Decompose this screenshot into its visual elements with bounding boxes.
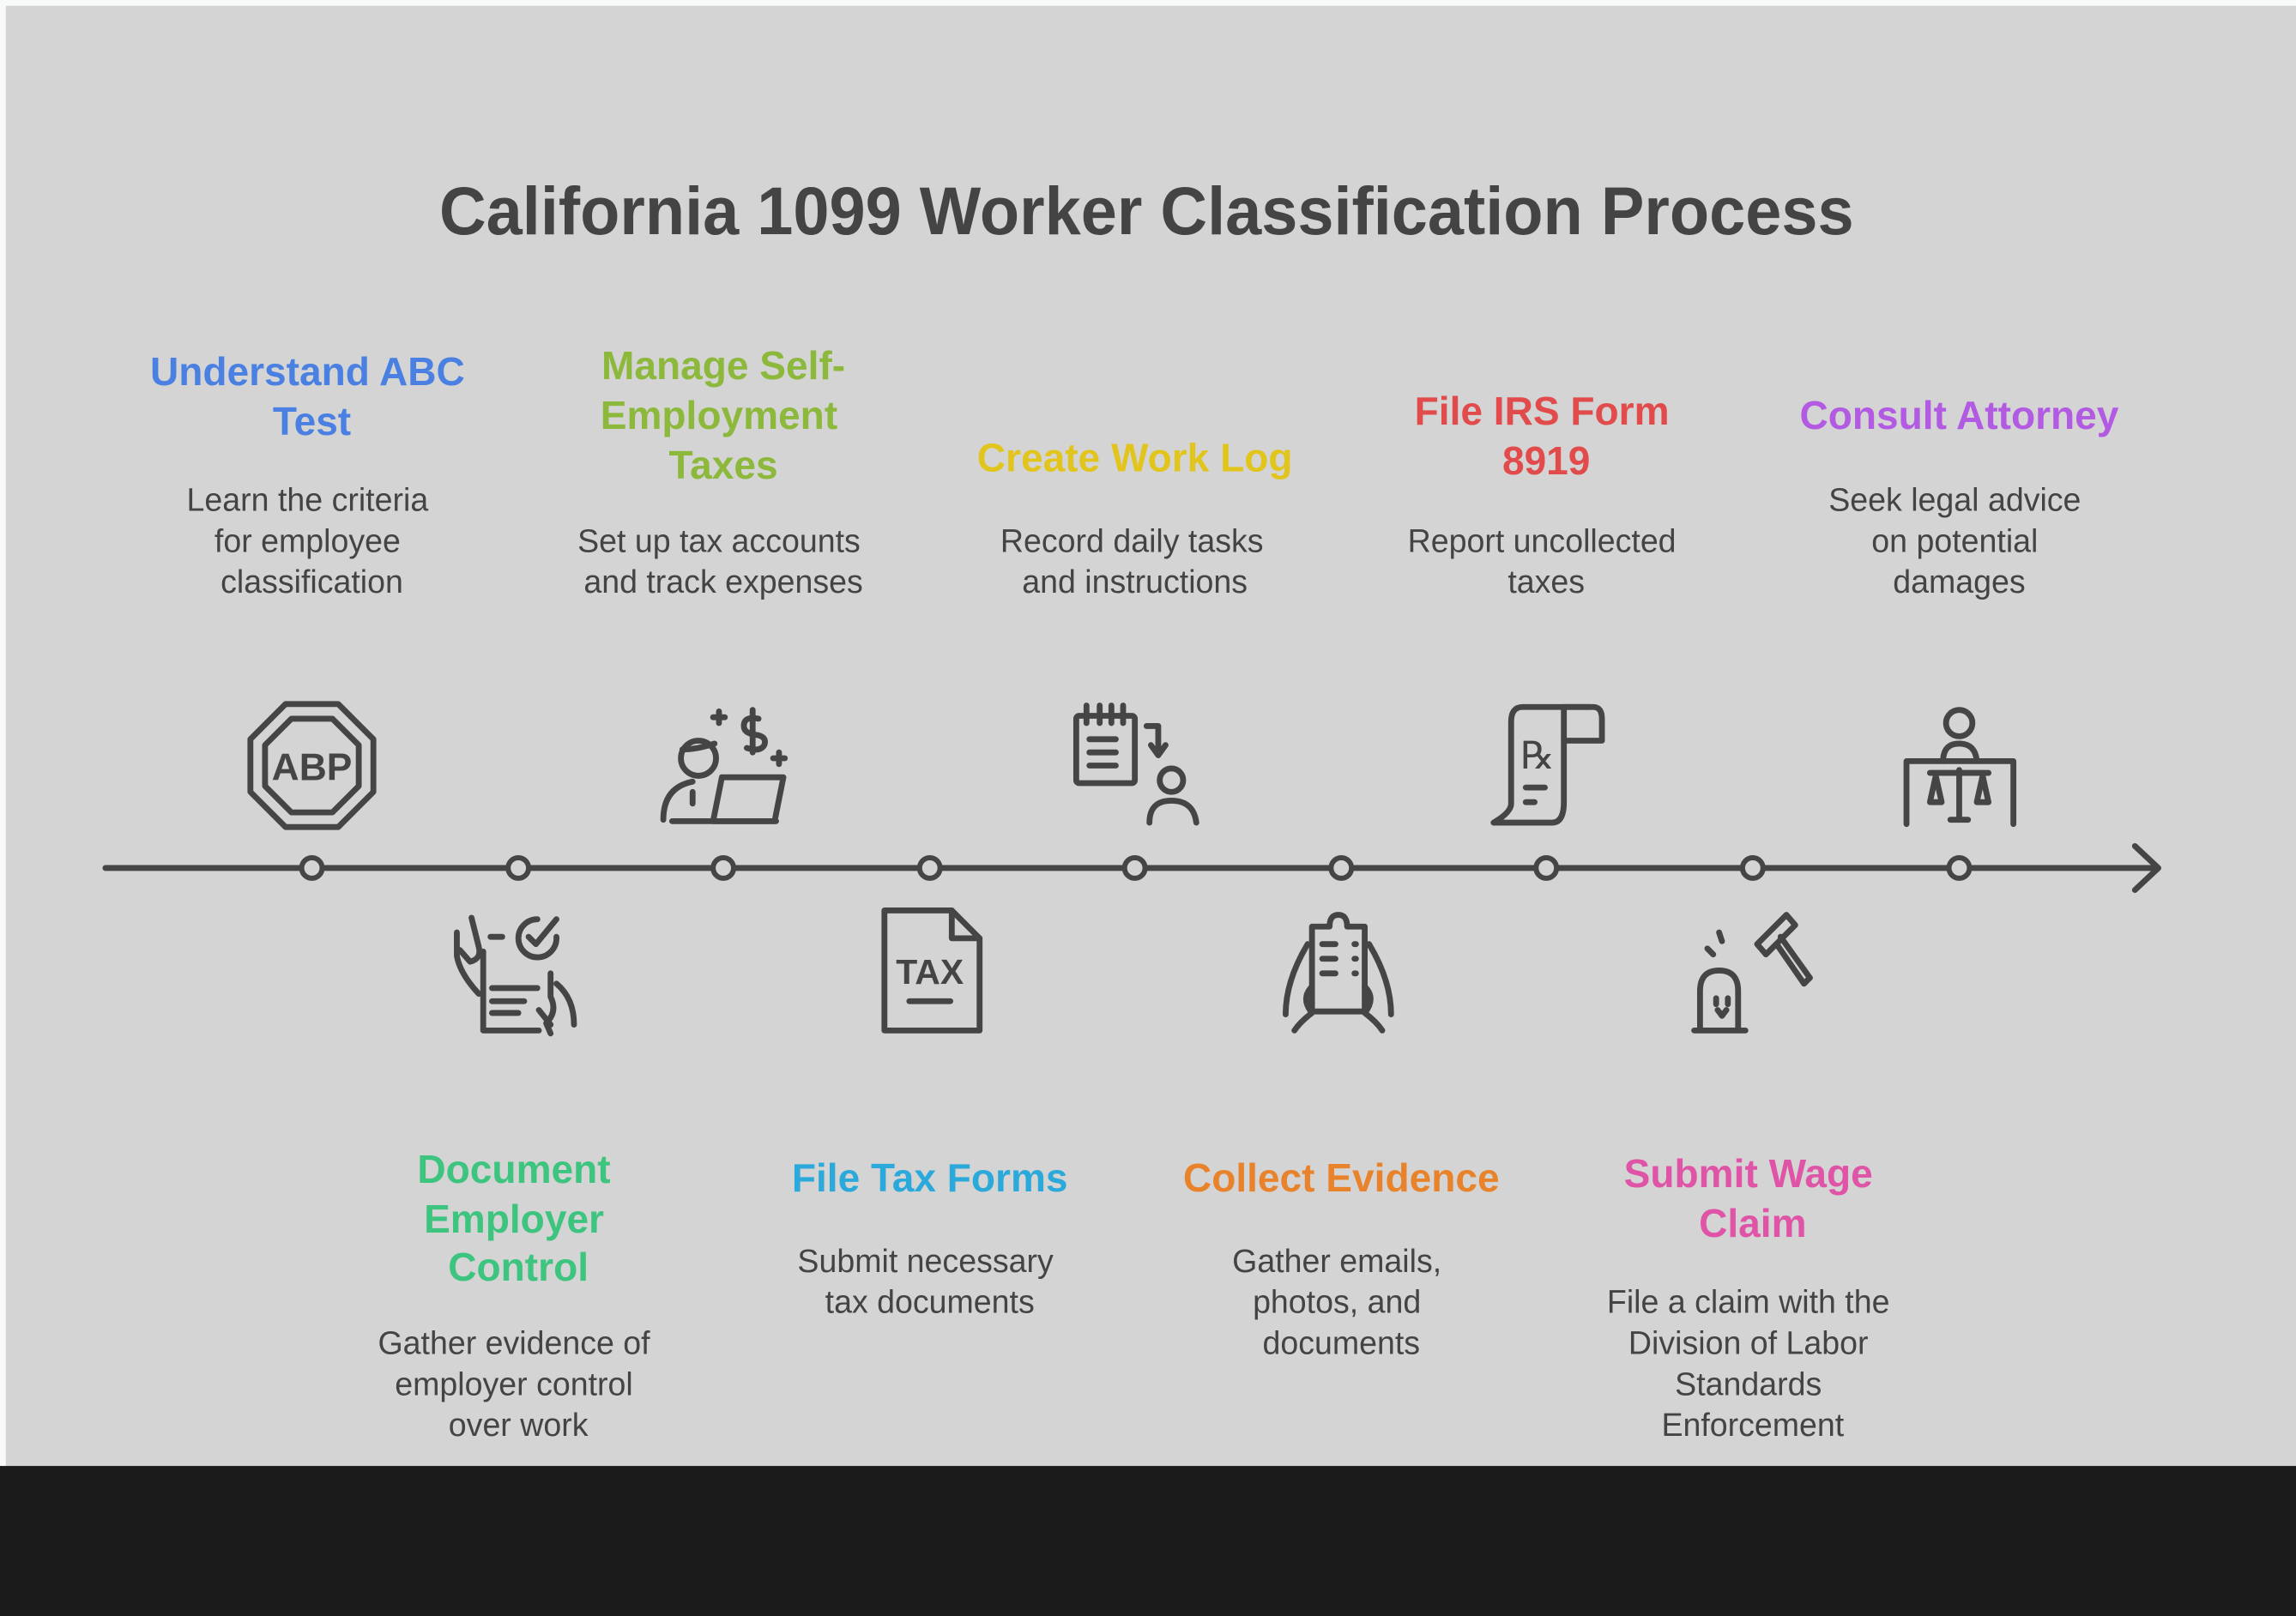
step: Submit Wage Claim: Claim — [1699, 1201, 1807, 1245]
icon: TAX document — [885, 910, 980, 1030]
step: Collect Evidence: Gather emails, — [1232, 1243, 1441, 1279]
step: Understand ABC Test: Understand ABC — [150, 349, 465, 394]
step: File Tax Forms: Submit necessary — [797, 1243, 1054, 1279]
step: Consult Attorney: Seek legal advice — [1828, 482, 2081, 518]
step: Document Employer Control: Control — [448, 1245, 589, 1289]
step: Submit Wage Claim: Standards — [1675, 1366, 1822, 1402]
icon: TAX document: TAX — [896, 952, 964, 992]
step: Manage Self-Employment Taxes: Taxes — [668, 443, 778, 487]
step: Document Employer Control: over work — [449, 1407, 589, 1443]
icon: form scroll — [1494, 707, 1602, 823]
step: Document Employer Control: Document — [417, 1147, 611, 1191]
step: Manage Self-Employment Taxes — [577, 343, 863, 600]
step: File Tax Forms: File Tax Forms — [792, 1155, 1068, 1200]
step: Submit Wage Claim: Submit Wage — [1624, 1151, 1873, 1196]
step: Create Work Log — [977, 436, 1293, 600]
step: Collect Evidence: photos, and — [1253, 1284, 1421, 1320]
step: Document Employer Control — [378, 1147, 650, 1443]
step: Manage Self-Employment Taxes: Employment — [601, 393, 837, 437]
icon: gavel — [1695, 915, 1810, 1030]
icon: work log — [1076, 706, 1196, 823]
step: Consult Attorney: Consult Attorney — [1800, 393, 2119, 437]
step: Collect Evidence: documents — [1262, 1325, 1420, 1361]
step: Collect Evidence: Collect Evidence — [1183, 1155, 1500, 1200]
icon: document with check and hands — [456, 918, 574, 1034]
step: File Tax Forms: tax documents — [825, 1284, 1035, 1320]
step: Understand ABC Test: for employee — [214, 522, 401, 558]
step: File IRS Form 8919: File IRS Form — [1415, 389, 1670, 433]
step: File IRS Form 8919: 8919 — [1502, 438, 1590, 483]
step: Consult Attorney: damages — [1893, 564, 2026, 600]
step: Create Work Log: Record daily tasks — [1000, 522, 1264, 558]
icon: hands holding list — [1285, 915, 1391, 1030]
step: Understand ABC Test: Learn the criteria — [187, 482, 428, 518]
step: Submit Wage Claim: Division of Labor — [1628, 1325, 1868, 1361]
step: File IRS Form 8919: taxes — [1508, 564, 1585, 600]
step: Collect Evidence — [1183, 1155, 1500, 1361]
step: Manage Self-Employment Taxes: Set up tax accounts — [577, 522, 861, 558]
step: Document Employer Control: Gather evidence of — [378, 1325, 650, 1361]
timeline arrow — [106, 846, 2159, 890]
step: Submit Wage Claim: File a claim with the — [1607, 1284, 1890, 1320]
icon: ABP octagon — [251, 704, 373, 827]
step: Submit Wage Claim: Enforcement — [1661, 1407, 1845, 1443]
step: Submit Wage Claim — [1607, 1151, 1890, 1443]
step: Understand ABC Test: Test — [273, 399, 351, 443]
icon: form scroll: ℞ — [1520, 735, 1555, 777]
step: File Tax Forms — [792, 1155, 1068, 1320]
icon: attorney with scales — [1906, 710, 2014, 824]
icon: self-employed person with laptop — [663, 710, 785, 821]
step: Understand ABC Test: classification — [221, 564, 403, 600]
step: Create Work Log: and instructions — [1022, 564, 1248, 600]
step: Understand ABC Test — [150, 349, 465, 600]
step: Manage Self-Employment Taxes: Manage Self- — [601, 343, 845, 388]
step: Document Employer Control: Employer — [424, 1197, 604, 1241]
step: Consult Attorney — [1800, 393, 2119, 600]
step: File IRS Form 8919 — [1408, 389, 1677, 600]
step: File IRS Form 8919: Report uncollected — [1408, 522, 1677, 558]
step: Document Employer Control: employer control — [395, 1366, 633, 1402]
icon: ABP octagon: ABP — [272, 747, 352, 789]
step: Consult Attorney: on potential — [1871, 522, 2038, 558]
step: Manage Self-Employment Taxes: and track expenses — [583, 564, 863, 600]
step: Create Work Log: Create Work Log — [977, 436, 1293, 479]
title: California 1099 Worker Classification Process — [439, 173, 1854, 249]
